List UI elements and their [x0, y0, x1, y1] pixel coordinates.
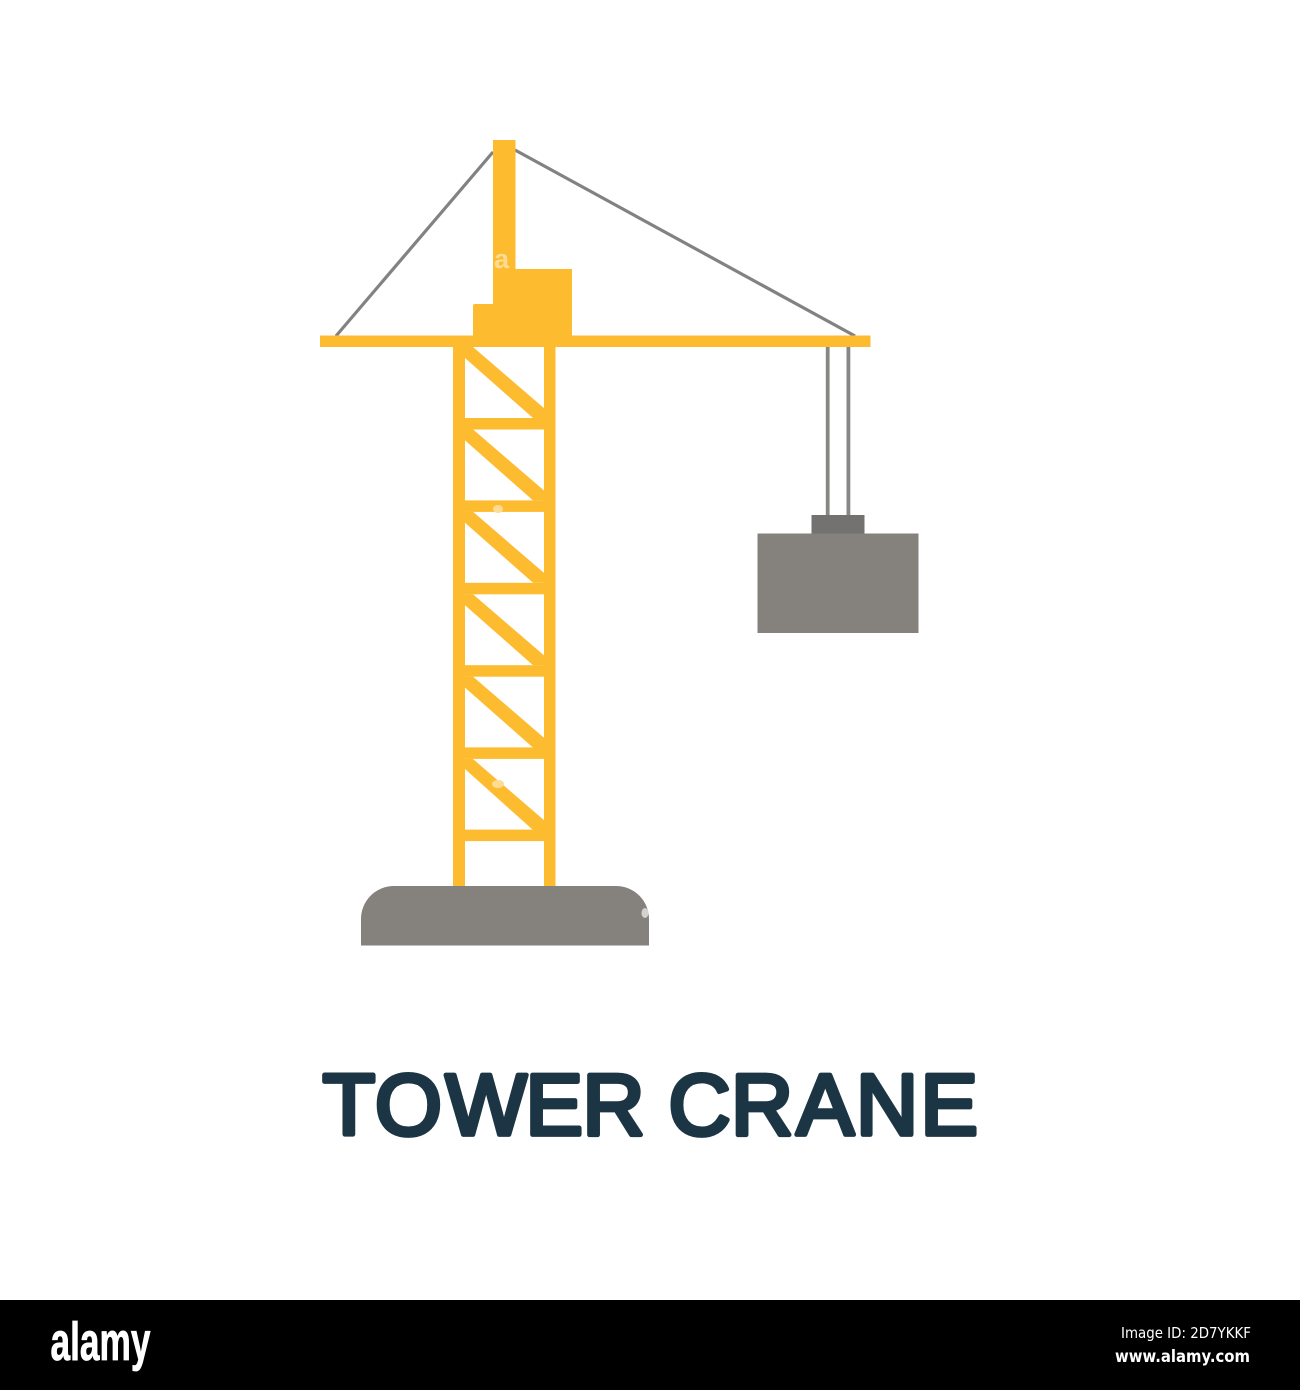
concrete base	[361, 886, 649, 946]
watermark traces	[492, 244, 648, 918]
icon: tower crane	[320, 140, 918, 946]
footer logo: alamy	[50, 1312, 150, 1372]
footer bar	[0, 1300, 1300, 1390]
hoist cables	[826, 347, 850, 516]
website: www.alamy.com	[1115, 1347, 1250, 1366]
support cables	[336, 150, 855, 336]
image id: Image ID: 2D7YKKF	[1121, 1324, 1251, 1342]
hanging load	[758, 534, 918, 633]
crane mast and cab	[473, 140, 572, 336]
title: TOWER CRANE	[0, 1058, 978, 1154]
hook block	[812, 515, 864, 534]
watermark traces: a	[494, 244, 510, 274]
crane boom	[320, 336, 870, 347]
lattice tower	[453, 347, 556, 887]
